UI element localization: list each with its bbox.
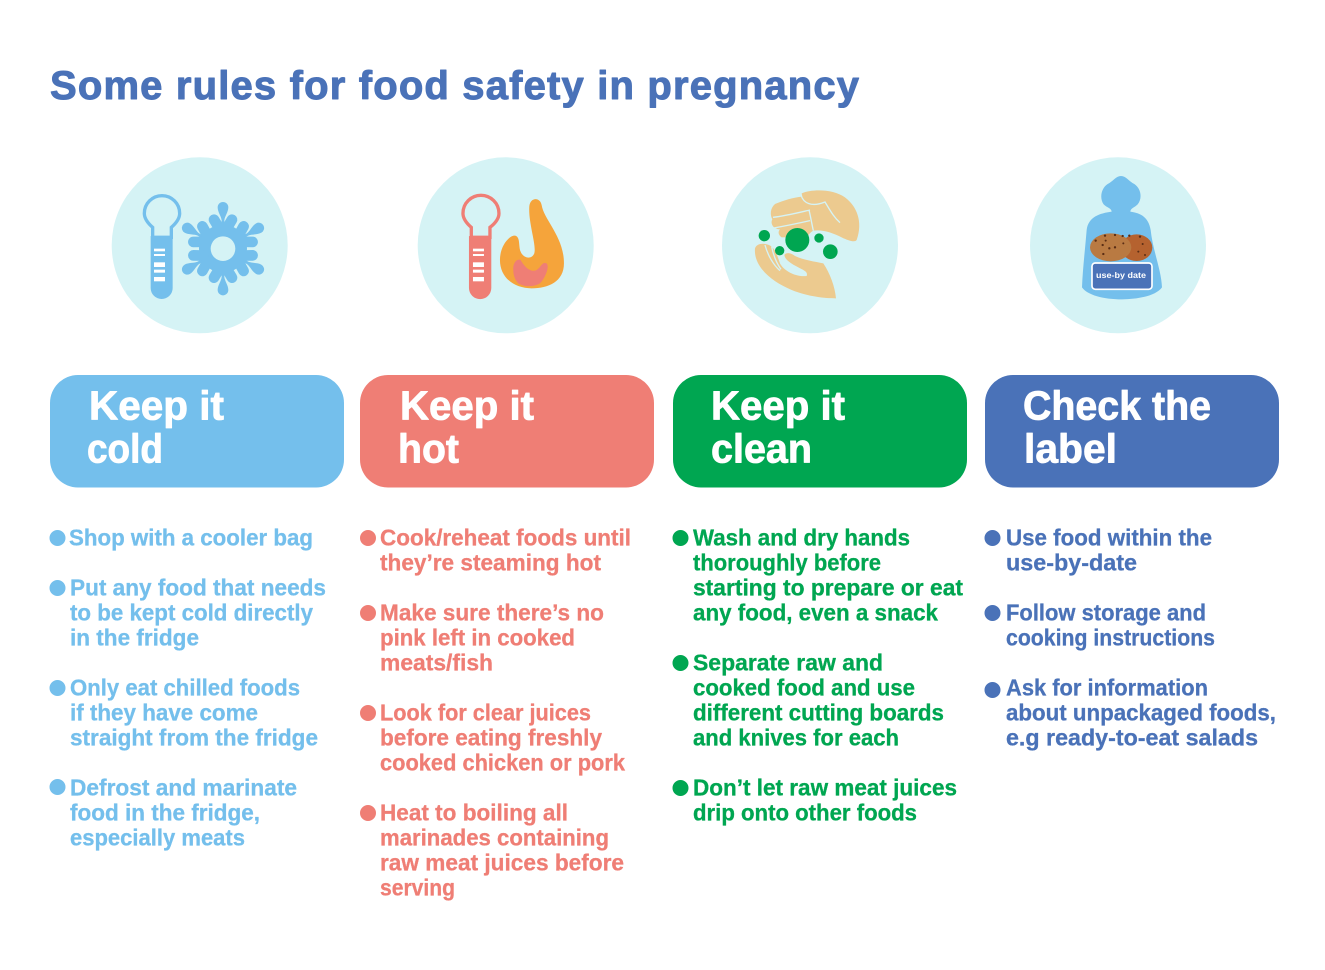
list: keep it clean rules	[673, 524, 963, 825]
list: check the label rules: Follow storage and	[1006, 599, 1206, 625]
panel: keep it cold	[50, 375, 344, 850]
list: keep it hot rules: serving	[380, 874, 455, 900]
heading: keep it hot: hot	[398, 425, 459, 471]
list: keep it cold rules: Shop with a cooler bag	[69, 524, 313, 550]
list: check the label rules: Ask for information	[1006, 674, 1208, 700]
icon: food bag with use-by date	[1030, 157, 1206, 333]
heading: keep it clean	[673, 375, 967, 488]
list: keep it hot rules: marinades containing	[380, 824, 609, 850]
list: keep it cold rules: straight from the fridge	[70, 724, 318, 750]
list: keep it hot rules: Look for clear juices	[380, 699, 591, 725]
list: keep it hot rules: Heat to boiling all	[380, 799, 568, 825]
list: keep it hot rules: they’re steaming hot	[380, 549, 601, 575]
list: check the label rules: e.g ready-to-eat salads	[1006, 724, 1258, 750]
list: keep it hot rules: raw meat juices before	[380, 849, 624, 875]
list: keep it hot rules: pink left in cooked	[380, 624, 575, 650]
heading: check the label: label	[1024, 425, 1117, 471]
list: keep it hot rules: before eating freshly	[380, 724, 602, 750]
list: keep it clean rules: different cutting boards	[693, 699, 944, 725]
heading: keep it hot: Keep it	[400, 382, 534, 428]
heading: keep it clean: Keep it	[711, 382, 845, 428]
list: keep it hot rules: Make sure there’s no	[380, 599, 604, 625]
list: keep it cold rules: food in the fridge,	[70, 799, 260, 825]
heading: keep it cold: cold	[87, 425, 163, 471]
heading: keep it cold: Keep it	[89, 382, 224, 428]
list: keep it clean rules: cooked food and use	[693, 674, 915, 700]
list: keep it clean rules: Separate raw and	[693, 649, 883, 675]
list: check the label rules: cooking instructions	[1006, 624, 1215, 650]
list: keep it cold rules: Defrost and marinate	[70, 774, 297, 800]
list: keep it cold rules: if they have come	[70, 699, 258, 725]
icon: cold thermometer and snowflake	[112, 157, 288, 333]
list: keep it cold rules: especially meats	[70, 824, 245, 850]
list: keep it cold rules	[50, 524, 326, 850]
list: keep it clean rules: and knives for each	[693, 724, 899, 750]
heading: keep it hot	[360, 375, 654, 488]
list: keep it cold rules: Put any food that needs	[70, 574, 326, 600]
icon: washing hands with germs	[722, 157, 898, 333]
list: keep it hot rules	[360, 524, 631, 900]
list: keep it hot rules: cooked chicken or pork	[380, 749, 625, 775]
list: keep it clean rules: Wash and dry hands	[693, 524, 910, 550]
icon: hot thermometer and flame	[418, 157, 594, 333]
panel: check the label	[985, 375, 1279, 750]
heading: check the label: Check the	[1023, 382, 1211, 428]
list: keep it cold rules: in the fridge	[70, 624, 199, 650]
list: keep it hot rules: meats/fish	[380, 649, 493, 675]
list: check the label rules: Use food within the	[1006, 524, 1212, 550]
list: keep it clean rules: thoroughly before	[693, 549, 881, 575]
list: keep it clean rules: starting to prepare or eat	[693, 574, 963, 600]
list: keep it cold rules: Only eat chilled foods	[70, 674, 300, 700]
icon: food bag with use-by date: use-by date	[1096, 270, 1146, 280]
list: keep it cold rules: to be kept cold directly	[70, 599, 313, 625]
heading: keep it cold	[50, 375, 344, 488]
list: check the label rules: use-by-date	[1006, 549, 1137, 575]
list: keep it clean rules: drip onto other foods	[693, 799, 917, 825]
list: check the label rules	[985, 524, 1276, 750]
list: keep it clean rules: Don’t let raw meat juices	[693, 774, 957, 800]
panel: keep it hot	[360, 375, 654, 900]
list: check the label rules: about unpackaged foods,	[1006, 699, 1276, 725]
heading: keep it clean: clean	[711, 425, 812, 471]
title: Some rules for food safety in pregnancy	[50, 64, 860, 108]
list: keep it clean rules: any food, even a snack	[693, 599, 938, 625]
panel: keep it clean	[673, 375, 967, 825]
list: keep it hot rules: Cook/reheat foods until	[380, 524, 631, 550]
heading: check the label	[985, 375, 1279, 488]
